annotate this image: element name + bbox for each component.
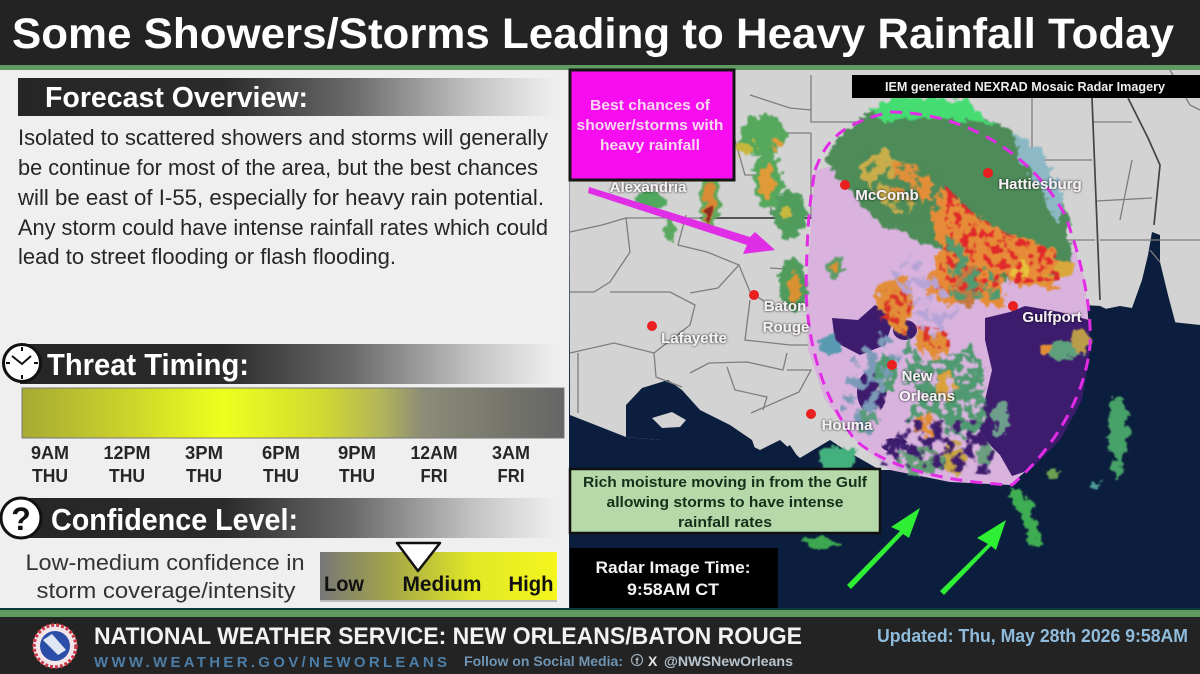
forecast text block: Isolated to scattered showers and storms will generally (18, 125, 549, 150)
icon: question mark (1, 498, 41, 538)
timing labels: THU (32, 466, 68, 486)
green arrows (847, 508, 1006, 595)
confidence text: storm coverage/intensity (36, 578, 296, 603)
radar source label (852, 75, 1200, 98)
forecast text block: lead to street flooding or flash flooding. (18, 244, 396, 269)
footer updated time: Updated: Thu, May 28th 2026 9:58AM (877, 626, 1188, 646)
city markers (648, 168, 1018, 418)
city labels: Alexandria (610, 179, 687, 196)
bays (626, 380, 805, 468)
city labels: Baton (764, 298, 806, 315)
callout: rich moisture: Rich moisture moving in from the Gulf (583, 474, 868, 491)
echoes: gulfport and offshore (804, 329, 1128, 548)
heading: forecast overview: Forecast Overview: (45, 82, 308, 114)
heading: threat timing: Threat Timing: (47, 347, 249, 382)
dashed risk outline (806, 112, 1090, 485)
footer social: Follow on Social Media: (464, 654, 623, 669)
city labels (610, 176, 1082, 434)
footer office name: NATIONAL WEATHER SERVICE: NEW ORLEANS/BATON ROUGE (94, 623, 802, 650)
risk area fill (806, 160, 1090, 485)
footer social: f (636, 656, 640, 666)
city labels: Orleans (899, 388, 955, 405)
echoes: green shield (825, 96, 1072, 285)
confidence scale (320, 543, 557, 602)
radar map (569, 70, 1200, 608)
heading: confidence level: Confidence Level: (51, 502, 298, 537)
timing labels (31, 443, 530, 486)
timing labels: 3PM (185, 443, 223, 463)
callout: rich moisture: rainfall rates (678, 514, 772, 531)
footer website: WWW.WEATHER.GOV/NEWORLEANS (94, 654, 447, 671)
city labels: Lafayette (661, 330, 727, 347)
city labels: New (902, 368, 933, 385)
forecast text block: Any storm could have intense rainfall rates which could (18, 215, 548, 240)
timing labels: 6PM (262, 443, 300, 463)
forecast text block (17, 125, 549, 269)
land (569, 70, 1200, 470)
city labels: McComb (855, 187, 919, 204)
title bar (0, 0, 1200, 70)
radar source label: IEM generated NEXRAD Mosaic Radar Imagery (885, 80, 1165, 94)
radar time box: 9:58AM CT (627, 580, 720, 599)
callout: rich moisture: allowing storms to have intense (606, 494, 844, 511)
confidence scale: Low (324, 573, 365, 596)
icon: nws logo (33, 624, 77, 668)
open water shading (832, 305, 1090, 476)
callout: rich moisture (570, 469, 880, 533)
panel: threat timing (4, 344, 564, 486)
timing labels: THU (109, 466, 145, 486)
rivers and state border (700, 98, 1160, 340)
mobile bay (1090, 232, 1200, 360)
city labels: Rouge (763, 319, 809, 336)
footer social: @NWSNewOrleans (664, 654, 793, 669)
footer social: X (648, 653, 658, 669)
forecast text block: will be east of I-55, especially for heavy rain potential. (17, 185, 544, 210)
confidence marker (397, 543, 440, 571)
footer (0, 608, 1200, 674)
confidence text: Low-medium confidence in (26, 550, 304, 575)
panel: confidence level (1, 498, 557, 603)
callout: best chances: Best chances of (590, 98, 710, 114)
timing labels: 12PM (104, 443, 150, 463)
forecast text block: be continue for most of the area, but the best chances (18, 155, 538, 180)
county lines (570, 70, 1200, 413)
echoes: main storm band (860, 150, 1075, 310)
confidence scale: Medium (402, 573, 482, 596)
timing labels: THU (186, 466, 222, 486)
confidence scale: High (508, 573, 554, 596)
city labels: Houma (822, 417, 873, 434)
footer social (464, 653, 793, 669)
city labels: Hattiesburg (998, 176, 1082, 193)
timing labels: FRI (420, 466, 448, 486)
radar time box (570, 548, 778, 608)
callout: best chances: heavy rainfall (600, 138, 700, 154)
timing labels: 12AM (410, 443, 458, 463)
pink arrow (588, 187, 775, 254)
icon: clock (4, 344, 40, 382)
echoes: west cells (634, 115, 843, 354)
echoes: speckle of heavier rain (860, 185, 1060, 470)
timing labels: FRI (498, 466, 524, 486)
timing labels: 9PM (338, 443, 376, 463)
timing labels: 3AM (492, 443, 530, 463)
callout: best chances: shower/storms with (576, 118, 724, 134)
echoes: south cells (858, 263, 1009, 474)
radar echoes (634, 96, 1128, 548)
confidence text (26, 550, 304, 603)
heading: forecast overview (18, 78, 555, 116)
timing bar (22, 388, 564, 438)
heading: threat timing (20, 344, 555, 384)
marsh island (652, 412, 686, 428)
panel: forecast overview (17, 78, 555, 269)
timing labels: THU (339, 466, 375, 486)
title: Some Showers/Storms Leading to Heavy Rainfall Today (12, 10, 1174, 58)
timing labels: 9AM (31, 443, 69, 463)
timing labels: THU (263, 466, 299, 486)
city labels: Gulfport (1022, 309, 1082, 326)
heading: confidence level (20, 498, 555, 538)
radar time box: Radar Image Time: (596, 558, 750, 577)
echoes: speckle of lighter rain (840, 150, 1000, 475)
callout: best chances (570, 70, 734, 180)
icon: question mark: ? (11, 501, 31, 537)
